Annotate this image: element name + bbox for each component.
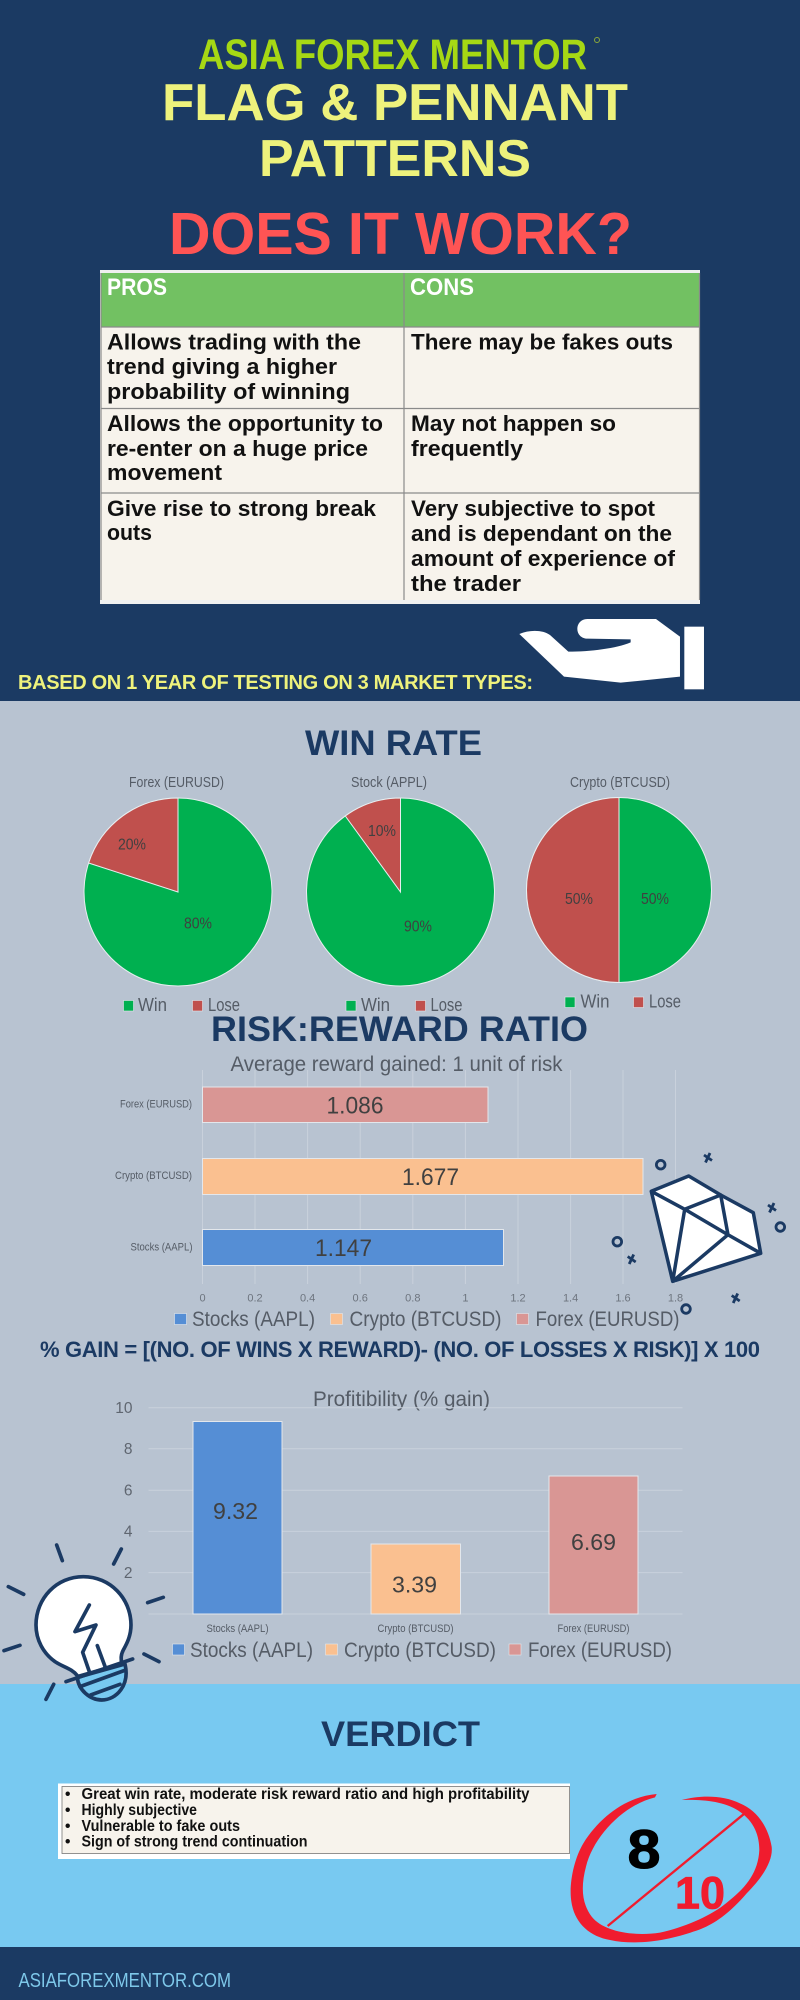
column: crypto: 3.39 [392,1572,437,1598]
pie chart: crypto: Lose [649,992,681,1012]
verdict bullet list: • [65,1818,70,1835]
axis labels: 0.4 [300,1292,315,1304]
pie chart: forex: Forex (EURUSD) [129,774,224,791]
pie chart: crypto: Win [580,992,610,1012]
logo wordmark: ASIA FOREX MENTOR [198,31,587,79]
verdict bullet list: • [65,1802,70,1819]
row 3: amount of experience of [411,546,676,571]
row 2 [107,411,616,485]
pie chart: forex [84,774,272,1015]
pie chart: stock: 90% [404,918,432,936]
bar: forex: Forex (EURUSD) [120,1098,192,1110]
legend: Crypto (BTCUSD) [350,1308,502,1331]
column: forex [549,1476,638,1635]
bar chart: risk reward [115,1053,683,1331]
row 1: probability of winning [107,379,350,404]
pie chart: forex: Lose [208,995,240,1015]
column: forex: Forex (EURUSD) [558,1623,630,1635]
heading: win rate: WIN RATE [305,724,482,763]
pie chart: forex: 20% [118,836,146,854]
title [162,74,628,188]
column chart: profitability: Profitibility (% gain) [313,1388,490,1411]
column chart: profitability [115,1388,682,1662]
panel: header with title and pros and cons [0,0,800,701]
pie chart: stock: 10% [368,823,396,840]
row 2: Allows the opportunity to [107,411,383,436]
table header row [107,274,474,301]
panel: verdict [0,1684,800,1947]
row 2: May not happen so [411,411,616,436]
y axis labels: 6 [124,1482,132,1500]
axis labels: 1.2 [510,1292,526,1304]
bar chart: risk reward: Average reward gained: 1 unit of risk [230,1053,563,1076]
y axis labels: 8 [124,1441,132,1458]
row 3: Very subjective to spot [411,496,656,521]
verdict bullet list: • [65,1834,70,1850]
verdict bullet list: Vulnerable to fake outs [82,1818,240,1835]
column: stocks [193,1422,282,1635]
verdict bullet list: Highly subjective [82,1802,197,1819]
row 1 [107,330,673,404]
testing note: BASED ON 1 YEAR OF TESTING ON 3 MARKET TYPES: [18,672,533,694]
axis labels: 0.8 [405,1292,420,1304]
pie chart: forex: 80% [184,916,212,932]
axis labels: 1.4 [563,1292,578,1304]
pie chart: crypto: Crypto (BTCUSD) [570,774,670,791]
axis labels [199,1292,683,1304]
legend: Stocks (AAPL) [190,1639,313,1662]
row 1: trend giving a higher [107,354,337,379]
legend: Forex (EURUSD) [536,1308,680,1331]
panel: footer [0,1947,800,2000]
column: crypto [371,1544,460,1635]
row 2: movement [107,460,223,485]
bar: forex: 1.086 [326,1093,384,1120]
row 3 [107,496,676,596]
row 3: Give rise to strong break [107,496,377,521]
legend: Crypto (BTCUSD) [344,1639,496,1662]
heading: verdict: VERDICT [321,1715,480,1754]
row 1: There may be fakes outs [411,330,673,354]
verdict bullet list [58,1784,570,1859]
y axis labels [115,1400,133,1582]
bar: crypto [115,1158,643,1194]
icon: light bulb [4,1545,163,1700]
row 2: frequently [411,436,524,461]
bar: crypto: Crypto (BTCUSD) [115,1170,192,1182]
axis labels: 0 [199,1292,206,1304]
heading: risk reward ratio: RISK:REWARD RATIO [211,1010,588,1049]
verdict bullet list: Great win rate, moderate risk reward ratio and high profitability [82,1786,530,1803]
pie chart: stock: Win [361,995,390,1015]
subtitle: DOES IT WORK? [169,201,632,267]
row 1: Allows trading with the [107,330,361,354]
bar: stocks: 1.147 [315,1235,372,1262]
bar: stocks: Stocks (AAPL) [130,1242,192,1254]
axis labels: 1.8 [668,1292,683,1304]
title: PATTERNS [259,130,531,188]
row 3: outs [107,520,152,545]
legend: Forex (EURUSD) [528,1639,672,1662]
pie chart: stock: Stock (APPL) [351,774,427,791]
pie chart: crypto [526,774,712,1012]
bar: forex [120,1087,488,1122]
column: crypto: Crypto (BTCUSD) [378,1623,454,1635]
y axis labels: 4 [124,1524,133,1540]
title: FLAG & PENNANT [162,74,628,132]
column: stocks: 9.32 [213,1498,258,1524]
icon: open hand [519,619,704,689]
legend: Stocks (AAPL) [192,1308,315,1331]
verdict bullet list: • [65,1786,70,1803]
score badge: 8 out of 10 [571,1794,772,1942]
pie chart: stock: Lose [430,995,462,1015]
column: stocks: Stocks (AAPL) [206,1623,268,1635]
bar: crypto: 1.677 [402,1164,459,1191]
axis labels: 1.6 [615,1292,631,1304]
website address: ASIAFOREXMENTOR.COM [18,1970,231,1992]
panel: test results [0,701,800,1684]
table header row: CONS [410,274,474,301]
row 3: and is dependant on the [411,521,672,546]
verdict bullet list: Sign of strong trend continuation [82,1834,308,1850]
y axis labels: 10 [115,1400,133,1417]
axis labels: 0.6 [353,1292,368,1304]
row 3: the trader [411,571,521,596]
pie chart: crypto: 50% [565,891,593,908]
bar: stocks [130,1230,504,1266]
legend [174,1308,680,1331]
axis labels: 1 [462,1292,468,1304]
pie chart: forex: Win [138,995,167,1015]
row 2: re-enter on a huge price [107,436,368,461]
pie chart: stock [306,774,494,1015]
legend [172,1639,672,1662]
score badge: 8 out of 10: 8 [628,1818,660,1880]
pros and cons table [100,270,700,604]
icon: diamond [613,1153,785,1313]
score badge: 8 out of 10: 10 [675,1868,725,1918]
formula: % GAIN = [(NO. OF WINS X REWARD)- (NO. OF LOSSES X RISK)] X 100 [40,1337,760,1362]
pie chart: crypto: 50% [641,891,669,908]
table header row: PROS [107,274,167,301]
column: forex: 6.69 [571,1529,616,1555]
axis labels: 0.2 [247,1292,263,1304]
y axis labels: 2 [124,1565,132,1582]
